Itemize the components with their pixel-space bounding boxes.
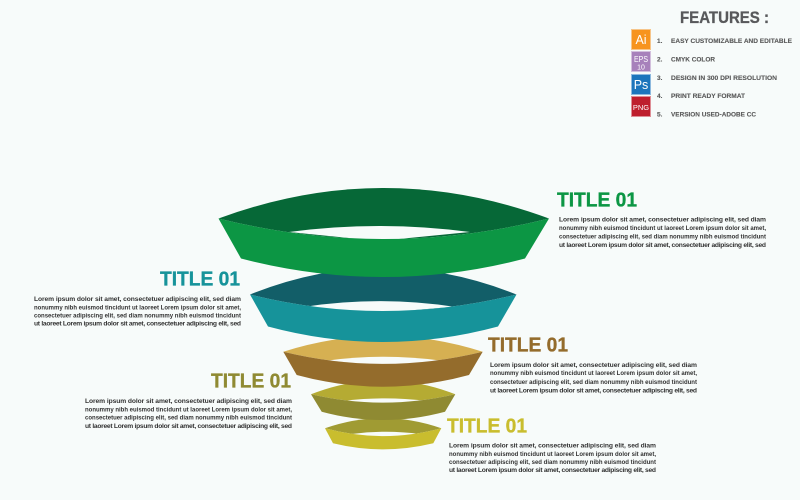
features list: CMYK COLOR — [671, 56, 715, 64]
icon: EPS 10: 10 — [637, 64, 645, 72]
icon: Ps — [632, 74, 650, 94]
title: tier 5: TITLE 01 — [447, 414, 527, 438]
icon: PNG — [632, 96, 650, 116]
funnel tier 1 — [218, 188, 549, 277]
title: tier 2: TITLE 01 — [160, 268, 240, 290]
title: tier 3: TITLE 01 — [488, 334, 568, 356]
text block: tier 5: ut laoreet Lorem ipsum dolor sit amet, consectetuer adipiscing elit, sed — [449, 467, 656, 474]
icon: Ai: Ai — [635, 33, 647, 47]
text block: tier 1: ut laoreet Lorem ipsum dolor sit amet, consectetuer adipiscing elit, sed — [559, 242, 766, 249]
text block: tier 2: Lorem ipsum dolor sit amet, consectetuer adipiscing elit, sed diam — [34, 296, 241, 303]
features list — [657, 38, 793, 118]
features list: 3. — [657, 75, 663, 82]
text block: tier 3: ut laoreet Lorem ipsum dolor sit amet, consectetuer adipiscing elit, sed — [490, 388, 697, 394]
features list: 4. — [657, 93, 663, 100]
text block: tier 4: consectetuer adipiscing elit, sed diam nonummy nibh euismod tincidunt — [85, 414, 293, 422]
text block: tier 4: ut laoreet Lorem ipsum dolor sit amet, consectetuer adipiscing elit, sed — [85, 423, 292, 430]
icon: EPS 10 — [632, 52, 650, 72]
text block: tier 2: nonummy nibh euismod tincidunt ut laoreet Lorem ipsum dolor sit amet, — [34, 304, 241, 312]
features list: 5. — [657, 112, 663, 118]
text block: tier 1 — [559, 216, 767, 249]
icon: EPS 10: EPS — [634, 54, 648, 64]
text block: tier 5: consectetuer adipiscing elit, sed diam nonummy nibh euismod tincidunt — [449, 459, 657, 466]
text block: tier 4: Lorem ipsum dolor sit amet, consectetuer adipiscing elit, sed diam — [85, 398, 292, 405]
funnel tier 4 — [311, 380, 455, 420]
text block: tier 2: ut laoreet Lorem ipsum dolor sit amet, consectetuer adipiscing elit, sed — [34, 320, 241, 328]
icon: Ps: Ps — [634, 78, 648, 92]
features list: 2. — [657, 56, 663, 64]
text block: tier 5: nonummy nibh euismod tincidunt ut laoreet Lorem ipsum dolor sit amet, — [449, 451, 656, 458]
features list: VERSION USED-ADOBE CC — [671, 112, 756, 118]
funnel tier 2 — [250, 268, 516, 342]
features list: DESIGN IN 300 DPI RESOLUTION — [671, 75, 777, 82]
title: tier 4: TITLE 01 — [211, 370, 291, 392]
features list: EASY CUSTOMIZABLE AND EDITABLE — [671, 38, 793, 45]
text block: tier 3 — [490, 362, 698, 394]
funnel tier 5 — [325, 418, 441, 449]
features list: 1. — [657, 38, 663, 45]
features list: PRINT READY FORMAT — [671, 93, 745, 100]
text block: tier 1: nonummy nibh euismod tincidunt ut laoreet Lorem ipsum dolor sit amet, — [559, 225, 766, 232]
text block: tier 4 — [85, 398, 293, 430]
features heading: FEATURES : — [680, 9, 769, 27]
title: tier 1: TITLE 01 — [557, 188, 637, 212]
text block: tier 2: consectetuer adipiscing elit, sed diam nonummy nibh euismod tincidunt — [34, 312, 242, 320]
funnel tier 3 — [283, 336, 483, 387]
text block: tier 1: Lorem ipsum dolor sit amet, consectetuer adipiscing elit, sed diam — [559, 216, 766, 224]
icon: PNG: PNG — [633, 103, 649, 112]
text block: tier 3: Lorem ipsum dolor sit amet, consectetuer adipiscing elit, sed diam — [490, 362, 697, 369]
text block: tier 3: nonummy nibh euismod tincidunt ut laoreet Lorem ipsum dolor sit amet, — [490, 370, 697, 377]
text block: tier 2 — [34, 296, 242, 328]
text block: tier 3: consectetuer adipiscing elit, sed diam nonummy nibh euismod tincidunt — [490, 379, 698, 386]
text block: tier 1: consectetuer adipiscing elit, sed diam nonummy nibh euismod tincidunt — [559, 234, 767, 240]
text block: tier 5 — [449, 442, 657, 474]
icon: Ai — [632, 30, 650, 50]
text block: tier 5: Lorem ipsum dolor sit amet, consectetuer adipiscing elit, sed diam — [449, 442, 656, 450]
text block: tier 4: nonummy nibh euismod tincidunt ut laoreet Lorem ipsum dolor sit amet, — [85, 406, 292, 414]
